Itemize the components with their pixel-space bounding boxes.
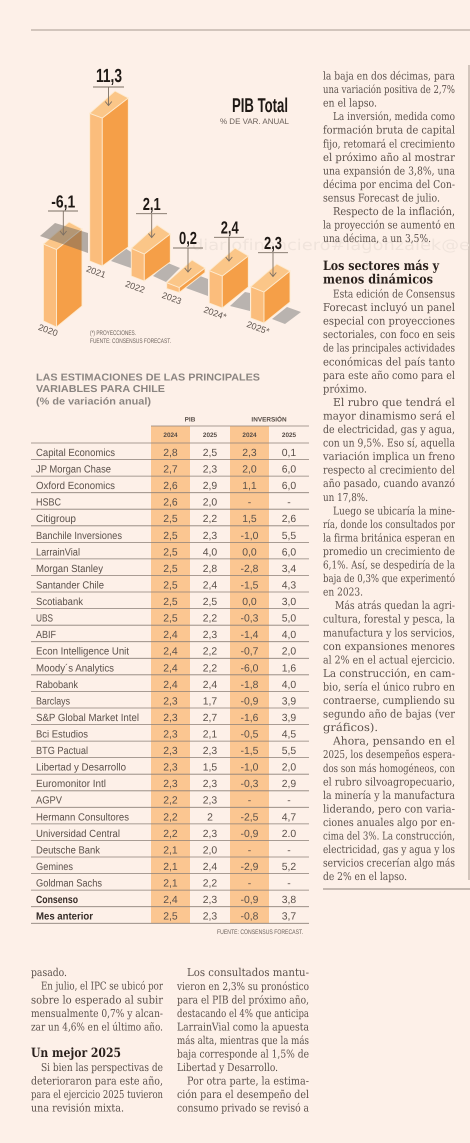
value labels <box>51 66 282 253</box>
table rows: UBS <box>36 614 53 625</box>
text block: right column top: Respecto de la inflación, <box>333 205 455 218</box>
table rows: 2,2 <box>163 796 178 807</box>
text block: right column body: para este año como para el <box>323 369 455 382</box>
table rows: 2,3 <box>203 895 217 906</box>
table rows: 2,8 <box>203 564 217 575</box>
table source: FUENTE: CONSENSUS FORECAST. <box>217 929 303 936</box>
text block: bottom middle column: destacando el 4% que anticipa <box>177 1007 309 1020</box>
table header: 2024 <box>163 432 178 439</box>
chart title: PIB Total <box>232 95 288 117</box>
text block: bottom left column bottom: una revisión mixta. <box>31 1101 124 1114</box>
table rows: 2,4 <box>163 895 178 906</box>
table rows: Goldman Sachs <box>36 878 102 890</box>
text block: right column top: sensus Forecast de julio. <box>323 191 440 204</box>
text block: right column body: especial con proyecciones <box>323 315 455 328</box>
table rows: 2,2 <box>163 812 178 823</box>
heading: Los sectores más y menos dinámicos: Los sectores más y <box>323 259 439 274</box>
table rows: LarrainVial <box>36 547 80 558</box>
table rows: Consenso <box>36 895 78 906</box>
text block: right column body: contraerse, cumpliendo su <box>323 694 455 707</box>
table header: 2025 <box>282 432 297 439</box>
text block: right column body: segundo año de bajas (ver <box>323 708 456 721</box>
table header: 2025 <box>203 432 218 439</box>
table rows: - <box>287 845 291 856</box>
heading: Los sectores más y menos dinámicos <box>323 259 439 288</box>
table rows: 4,0 <box>203 547 217 558</box>
text block: right column body: año pasado, cuando avanzó <box>323 477 455 490</box>
table rows: 2,2 <box>203 647 217 658</box>
text block: right column body: de electricidad, gas y agua, <box>323 423 455 436</box>
table rows: -6,0 <box>241 663 259 674</box>
table rows: 2,3 <box>203 779 217 790</box>
text block: right column body: de 2% en el lapso. <box>323 870 407 883</box>
table rows: -0,7 <box>241 647 259 658</box>
table rows: Morgan Stanley <box>36 564 104 575</box>
text block: bottom left column bottom <box>31 1061 163 1114</box>
text block: bottom middle column: Los consultados mantu- <box>187 966 309 979</box>
table rows: 2,3 <box>203 464 217 476</box>
table rows: Libertad y Desarrollo <box>36 763 126 774</box>
table rows: -0,9 <box>241 895 259 906</box>
table rows: 5,5 <box>282 746 296 757</box>
table rows: -2,9 <box>241 862 259 873</box>
table rows: 1,6 <box>282 663 296 674</box>
table rows: 0,0 <box>242 547 257 558</box>
text block: right column body: Forecast incluyó un panel <box>323 301 456 314</box>
table rows: -2,8 <box>241 564 259 575</box>
table rows: 2,6 <box>163 498 178 509</box>
table rows: 2,5 <box>163 580 178 592</box>
table rows: 2,3 <box>203 531 217 542</box>
table rows: Citigroup <box>36 514 76 525</box>
table rows: 2,2 <box>203 663 217 674</box>
table rows: 6,0 <box>282 547 296 558</box>
table rows: 6,0 <box>282 464 296 476</box>
table rows: BTG Pactual <box>36 746 88 757</box>
table rows: 5,2 <box>282 862 296 873</box>
table rows: 6,0 <box>282 481 296 492</box>
table rows: 3,9 <box>282 713 296 724</box>
text block: right column body: liderando, pero con varia- <box>323 802 455 815</box>
table rows: 2,3 <box>163 746 178 757</box>
text block: right column body: gráficos). <box>323 721 378 734</box>
table rows: ABIF <box>36 630 56 641</box>
table header: PIB <box>185 416 196 423</box>
table rows: 2,4 <box>203 862 217 873</box>
table rows: 2,3 <box>163 763 178 774</box>
text block: right column body: cultura, forestal y pesca, la <box>323 613 455 626</box>
table rows: Moody´s Analytics <box>36 663 114 674</box>
table rows: 2,3 <box>203 829 217 840</box>
table rows: - <box>287 796 291 807</box>
table rows: 2,7 <box>163 464 178 476</box>
table rows: 5,0 <box>282 614 296 625</box>
text block: bottom left column bottom: Si bien las perspectivas de <box>41 1061 163 1074</box>
table rows: -0,9 <box>241 696 259 707</box>
text block: right column body: económicas del país tanto <box>323 355 455 368</box>
table rows: 3,9 <box>282 696 296 707</box>
arrows <box>48 87 288 276</box>
text block: bottom left column top: mensualmente 0,7% y alcan- <box>31 1007 163 1020</box>
table rows: 2,3 <box>163 779 178 790</box>
table rows: 2,5 <box>163 564 178 575</box>
text block: bottom middle column: más alta, mientras que la más <box>177 1034 309 1047</box>
text block: right column body: un 17,8%. <box>323 491 368 504</box>
table rows: 1,5 <box>203 763 217 774</box>
table rows: -1,5 <box>241 580 259 592</box>
table rows: Mes anterior <box>36 912 93 923</box>
table rows: 2,4 <box>163 680 178 691</box>
value labels: 2,4 <box>221 218 239 238</box>
table rows: 2,5 <box>163 912 178 923</box>
table rows: 2,2 <box>163 829 178 840</box>
table rows: 2,4 <box>203 580 217 592</box>
text block: bottom middle column: ción para el desempeño del <box>177 1088 309 1101</box>
table rows: 1,1 <box>242 481 257 492</box>
table rows: -1,5 <box>241 746 259 757</box>
table rows: 2,0 <box>282 763 296 774</box>
table rows: 5,5 <box>282 531 296 542</box>
table rows: 2,0 <box>282 647 296 658</box>
chart footnote: (*) PROYECCIONES. <box>90 330 136 337</box>
table rows: 2,1 <box>163 862 178 873</box>
watermark: diariofinanciero#lagonzalek@e <box>192 236 470 254</box>
text block: bottom middle column: LarrainVial como la apuesta <box>177 1020 309 1033</box>
bar 2023 <box>167 260 205 292</box>
text block: bottom middle column: consumo privado se revisó a <box>177 1102 309 1115</box>
table rows: Capital Economics <box>36 448 115 459</box>
table rows: 3,8 <box>282 895 296 906</box>
table rows: -0,9 <box>241 829 259 840</box>
chart footnote: FUENTE: CONSENSUS FORECAST. <box>90 338 171 345</box>
bar chart: PIB total <box>37 66 301 338</box>
table rows: 2,1 <box>203 730 217 740</box>
text block: right column body: al 2% en el actual ejercicio. <box>323 653 455 666</box>
table rows: 3,0 <box>282 597 296 608</box>
text block: right column body: en 2023. <box>323 586 363 599</box>
text block: bottom left column top: zar un 4,6% en el último año. <box>31 1020 163 1033</box>
text block: bottom left column top <box>31 966 164 1033</box>
table header <box>163 415 297 439</box>
table rows: 2,5 <box>163 547 178 558</box>
table rows: 2,3 <box>163 730 178 740</box>
text block: right column body: mayor dinamismo será el <box>323 409 456 422</box>
table: estimaciones <box>31 415 309 923</box>
table rows: 3,4 <box>282 564 296 575</box>
table rows: -1,6 <box>241 713 259 724</box>
table rows: 2,5 <box>203 448 217 459</box>
year labels: 2024* <box>202 304 228 322</box>
table rows: -1,4 <box>241 630 259 641</box>
table rows: - <box>248 878 251 890</box>
table rows: JP Morgan Chase <box>36 464 111 476</box>
text block: bottom left column top: sobre lo esperado al subir <box>31 993 164 1006</box>
text block: bottom left column bottom: para el ejercicio 2025 tuvieron <box>31 1088 163 1101</box>
table title: VARIABLES PARA CHILE <box>36 384 165 395</box>
table rows: 2,3 <box>203 796 217 807</box>
table rows: 2,2 <box>203 878 217 890</box>
value labels: 11,3 <box>96 66 122 87</box>
table rows: Deutsche Bank <box>36 845 101 856</box>
text block: right column body: variación implica un freno <box>322 450 455 463</box>
table rows: 2,3 <box>203 746 217 757</box>
text block: bottom middle column: para el PIB del próximo año, <box>177 993 309 1006</box>
text block: right column top: el próximo año al mostrar <box>323 151 456 164</box>
text block: right column body: bio, sería el único rubro en <box>323 680 455 693</box>
table rows: 0,0 <box>242 597 257 608</box>
bar 2022 <box>131 225 170 281</box>
table rows: 2,2 <box>203 614 217 625</box>
bar 2024 <box>209 248 248 308</box>
table rows: - <box>287 498 291 509</box>
table rows: 2,9 <box>203 481 217 492</box>
text block: bottom middle column: baja corresponde al 1,5% de <box>177 1048 309 1060</box>
table rows: 4,0 <box>282 680 296 691</box>
text block: bottom left column bottom: deterioraron para este año, <box>31 1074 163 1087</box>
table rows: 3,7 <box>282 912 296 923</box>
text block: right column top: en el lapso. <box>323 97 377 110</box>
table rows: Rabobank <box>36 680 79 691</box>
table rows: -0,3 <box>241 779 259 790</box>
chart title <box>220 95 290 126</box>
table rows: 2,0 <box>242 464 257 476</box>
table rows: Euromonitor Intl <box>36 779 106 790</box>
table rows: 2,3 <box>242 448 257 459</box>
heading: Un mejor 2025: Un mejor 2025 <box>31 1046 121 1061</box>
bar 2021 <box>90 91 128 266</box>
table rows: 2.0 <box>282 829 296 840</box>
value labels: 0,2 <box>179 228 197 248</box>
table rows: 4,0 <box>282 630 296 641</box>
table rows: 4,7 <box>282 812 296 823</box>
table rows: 2,4 <box>163 630 178 641</box>
table rows: 2,1 <box>163 845 178 856</box>
year labels <box>37 264 271 338</box>
table rows: 2,7 <box>203 713 217 724</box>
table rows: 2,2 <box>203 514 217 525</box>
table rows: - <box>287 878 291 890</box>
table rows: Gemines <box>36 862 73 873</box>
floor shadows <box>111 248 301 324</box>
table rows: - <box>248 498 251 509</box>
heading: Los sectores más y menos dinámicos: menos dinámicos <box>323 272 433 288</box>
text block: right column body: el rubro silvoagropecuario, <box>323 775 455 788</box>
table rows: 2,5 <box>163 614 178 625</box>
table rows: 2,5 <box>163 531 178 542</box>
year labels: 2021 <box>85 264 107 280</box>
table title: (% de variación anual) <box>36 396 151 407</box>
table rows: -1,8 <box>241 680 259 691</box>
shadow 2020 over bar <box>40 223 88 253</box>
table rows: Hermann Consultores <box>36 812 129 823</box>
table rows: Scotiabank <box>36 597 84 608</box>
text block: bottom middle column: vieron en 2,3% su pronóstico <box>176 980 309 993</box>
text block: right column body <box>322 288 456 883</box>
table rows: 2,3 <box>203 630 217 641</box>
table rows: 2,3 <box>163 696 178 707</box>
value labels: 2,3 <box>264 233 282 253</box>
table rows: -0,3 <box>241 614 259 625</box>
table rows: 2,8 <box>163 448 178 459</box>
text block: right column body: El rubro que tendrá el <box>333 396 456 409</box>
text block: right column body: ciones anuales algo por en- <box>323 816 455 829</box>
table rows: 2,6 <box>163 481 178 492</box>
year labels: 2023 <box>161 290 183 306</box>
table rows: 2,4 <box>203 680 217 691</box>
table rows: Barclays <box>36 696 70 707</box>
year labels: 2020 <box>37 322 59 338</box>
table rows: Santander Chile <box>36 580 104 592</box>
table rows: -0,8 <box>241 912 259 923</box>
table rows: 2,6 <box>282 514 296 525</box>
value labels: -6,1 <box>51 192 76 212</box>
table rows: 2 <box>207 812 213 823</box>
table rows: 4,3 <box>282 580 296 592</box>
table rows: 2,3 <box>163 713 178 724</box>
table header: 2024 <box>242 432 257 439</box>
table rows: 2,5 <box>203 597 217 608</box>
table rows: HSBC <box>36 498 61 509</box>
table rows: 2,1 <box>163 878 178 890</box>
text block: right column body: próximo. <box>323 382 367 395</box>
value labels: 2,1 <box>143 194 161 214</box>
table rows: 2,4 <box>163 663 178 674</box>
table rows: -1,0 <box>241 531 259 542</box>
table rows: 1,5 <box>242 514 257 525</box>
table rows: 2,9 <box>282 779 296 790</box>
bar 2020 <box>44 222 82 327</box>
text block: bottom middle column <box>176 966 309 1115</box>
table rows: 2,0 <box>203 498 217 509</box>
year labels: 2022 <box>124 279 146 295</box>
table header: INVERSIÓN <box>251 415 287 423</box>
text block: bottom middle column: Por otra parte, la estima- <box>187 1075 309 1088</box>
table rows: 2,0 <box>203 845 217 856</box>
table rows: Oxford Economics <box>36 481 115 492</box>
text block: right column top <box>323 70 456 245</box>
table rows: Bci Estudios <box>36 730 88 740</box>
text block: bottom middle column: Libertad y Desarrollo. <box>177 1061 278 1074</box>
table rows: -1,0 <box>241 763 259 774</box>
table rows: 2,5 <box>163 514 178 525</box>
table title <box>36 372 260 407</box>
table rows: 1,7 <box>203 696 217 707</box>
text block: right column top: una décima, a un 3,5%. <box>323 232 431 245</box>
chart title: % DE VAR. ANUAL <box>220 117 290 126</box>
bar 2025 <box>251 264 290 323</box>
table rows: 4,5 <box>282 730 296 740</box>
table rows: 0,1 <box>282 448 296 459</box>
table rows: Econ Intelligence Unit <box>36 647 129 658</box>
table rows: AGPV <box>36 796 62 807</box>
table rows: S&P Global Market Intel <box>36 713 139 724</box>
text block: bottom left column top: pasado. <box>31 966 67 979</box>
table rows <box>36 448 296 923</box>
table rows: - <box>248 796 251 807</box>
text block: right column body: con expansiones menores <box>323 640 455 653</box>
text block: right column body: La construcción, en cam- <box>323 667 455 680</box>
table rows: 2,3 <box>203 912 217 923</box>
table title: LAS ESTIMACIONES DE LAS PRINCIPALES <box>36 372 260 383</box>
table rows: -2,5 <box>241 812 259 823</box>
table rows: Universidad Central <box>36 829 120 840</box>
table rows: -0,5 <box>241 730 259 740</box>
chart footnote <box>90 330 171 345</box>
text block: right column body: Ahora, pensando en el <box>332 735 456 748</box>
text block: right column body: respecto al crecimiento del <box>323 464 455 477</box>
text block: right column top: formación bruta de capital <box>323 124 455 137</box>
table rows: 2,4 <box>163 647 178 658</box>
table rows: 2,5 <box>163 597 178 608</box>
text block: bottom left column top: En julio, el IPC se ubicó por <box>41 980 164 993</box>
table rows: - <box>248 845 251 856</box>
table rows: Banchile Inversiones <box>36 531 122 542</box>
year labels: 2025* <box>245 319 271 337</box>
